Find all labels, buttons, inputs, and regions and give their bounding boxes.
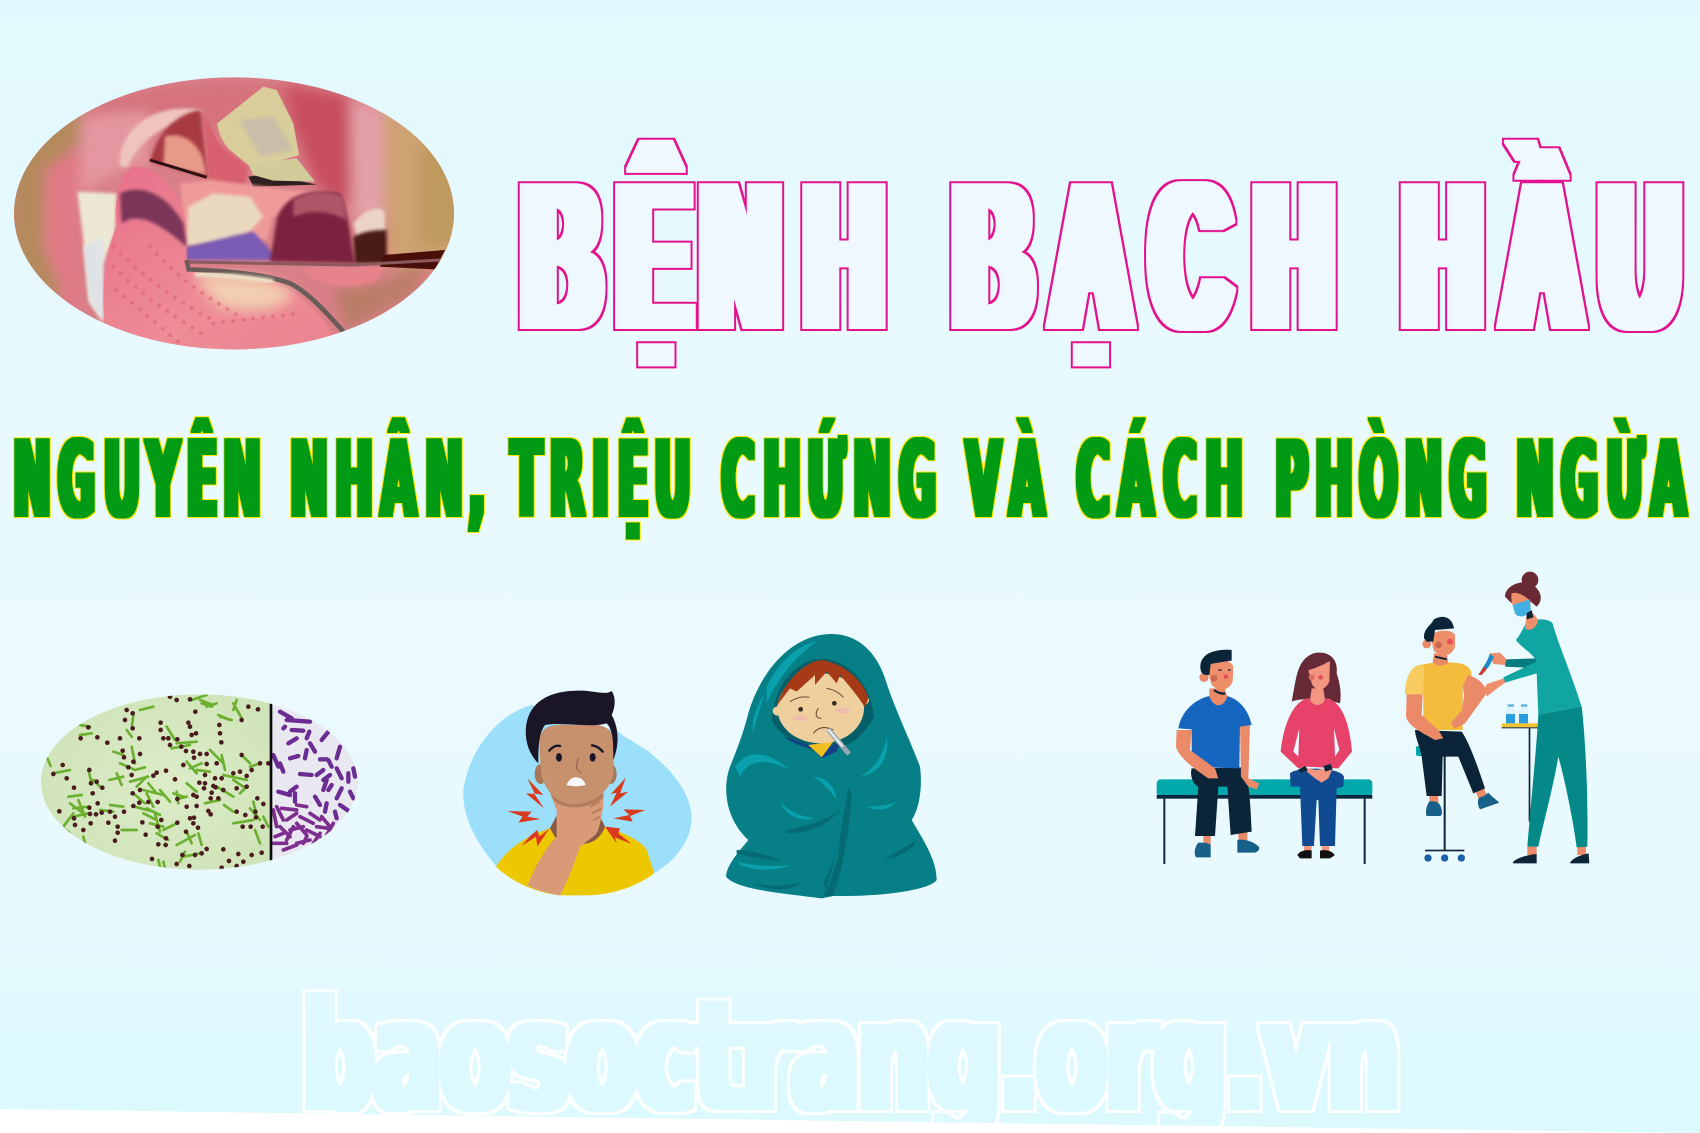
main title: BỆNH BẠCH HẦU <box>524 140 1678 374</box>
table with vials <box>1502 704 1538 822</box>
green rods <box>47 695 268 868</box>
patient <box>1405 617 1499 816</box>
subtitle: NGUYÊN NHÂN, TRIỆU CHỨNG VÀ CÁCH PHÒNG NGỪA <box>13 419 1686 542</box>
photo: bacteria micrograph <box>40 693 360 872</box>
man in blue shirt <box>1176 650 1259 857</box>
illustration: man with sore throat <box>463 691 692 895</box>
illustration: man receiving vaccination from nurse <box>1405 572 1589 863</box>
photo: throat with diphtheria membrane <box>14 77 454 350</box>
white bottom wedge <box>0 1109 1700 1133</box>
purple rods <box>273 712 355 818</box>
nurse <box>1478 572 1589 863</box>
dark spores <box>53 697 268 868</box>
stool <box>1416 746 1465 862</box>
illustration: waiting patients on bench <box>1157 650 1372 864</box>
illustration: child wrapped in blanket with thermometer <box>726 634 937 898</box>
woman in pink sweater <box>1281 653 1352 858</box>
